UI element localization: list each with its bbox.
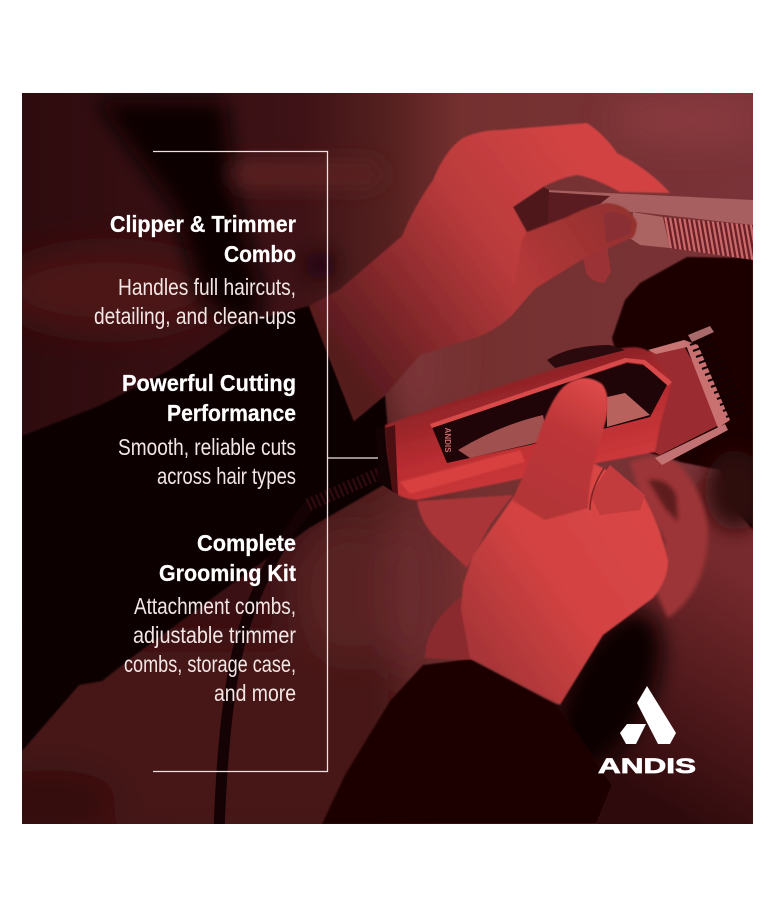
thumb (512, 378, 608, 520)
lower hand fingers (417, 495, 513, 568)
clipper (385, 326, 745, 500)
dark blur behind heading (95, 100, 262, 335)
middle finger (583, 245, 611, 283)
clipper body (385, 347, 672, 500)
thumb nail (604, 212, 632, 243)
logo wordmark: ANDIS (598, 755, 696, 778)
Andis logo (598, 686, 696, 778)
power cord (214, 542, 290, 824)
feature: complete grooming kit: Complete (197, 530, 296, 556)
feature: powerful cutting performance: Powerful Cutting (122, 370, 296, 396)
palm and index finger (309, 123, 670, 421)
feature: clipper and trimmer combo: Clipper & Trimmer (110, 211, 296, 237)
feature: complete grooming kit: combs, storage case, (124, 651, 296, 677)
lower hand (425, 463, 668, 705)
feature: clipper and trimmer combo: Handles full haircuts, (118, 274, 296, 300)
clipper window (432, 363, 668, 463)
dark figure silhouette (22, 306, 392, 751)
feature: complete grooming kit: adjustable trimmer (133, 622, 296, 648)
feature: powerful cutting performance (118, 370, 296, 489)
logo mark (620, 686, 676, 744)
feature: complete grooming kit: Grooming Kit (159, 560, 296, 586)
feature: powerful cutting performance: Smooth, reliable cuts (118, 434, 296, 460)
comb (545, 190, 753, 260)
feature: complete grooming kit: Attachment combs, (134, 593, 296, 619)
feature: powerful cutting performance: across hair types (157, 463, 296, 489)
shadow between fingers (513, 187, 549, 234)
feature: clipper and trimmer combo (94, 211, 296, 329)
feature: powerful cutting performance: Performance (167, 400, 296, 426)
feature: clipper and trimmer combo: detailing, and clean-ups (94, 303, 296, 329)
ear (630, 457, 708, 618)
coiled cord strain relief (308, 468, 392, 505)
sleeve (322, 659, 613, 824)
clipper top switch (547, 345, 625, 368)
neck (557, 528, 753, 824)
clipper highlight (430, 358, 672, 428)
infographic panel (22, 93, 753, 824)
clipper blade and guard (640, 326, 745, 465)
feature: complete grooming kit (124, 530, 296, 706)
feature: clipper and trimmer combo: Combo (224, 241, 296, 267)
feature: complete grooming kit: and more (214, 680, 296, 706)
hand holding comb (309, 123, 670, 421)
thumb gripping comb (510, 203, 637, 317)
bracket frame with connector to clipper (153, 152, 378, 772)
hair (612, 257, 753, 530)
clipper window: ANDIS (443, 428, 452, 453)
